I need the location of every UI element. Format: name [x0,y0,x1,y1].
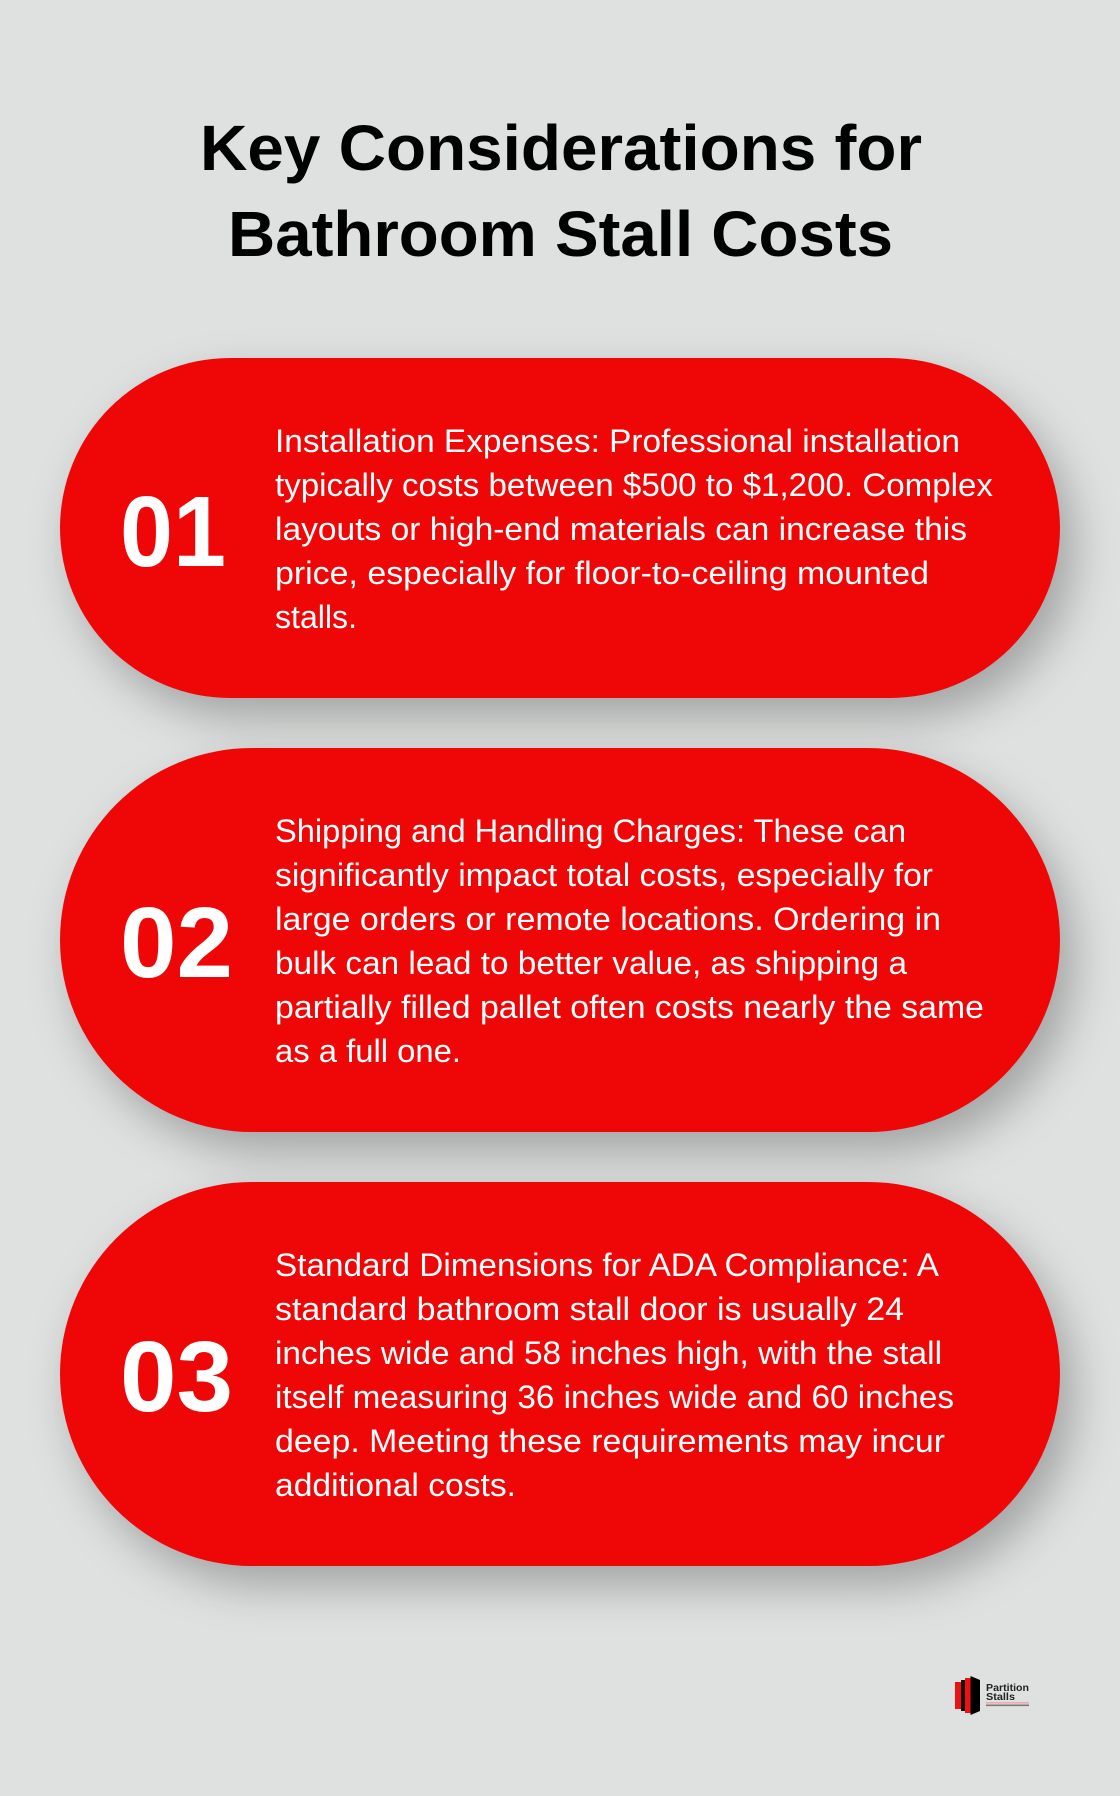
number 03: 03 [120,1321,233,1433]
text block: bulk can lead to better value, as shipping a [275,945,908,981]
text block: partially filled pallet often costs nearly the same [275,989,984,1025]
panel: shipping and handling [60,748,1060,1132]
icon: stall doors [955,1676,980,1715]
text block: Standard Dimensions for ADA Compliance: A [275,1247,939,1283]
text block [275,1247,954,1503]
text block: standard bathroom stall door is usually 24 [275,1291,904,1327]
card background [60,358,1060,698]
text block: additional costs. [275,1467,516,1503]
text block: itself measuring 36 inches wide and 60 inches [275,1379,954,1415]
logo: Partition Stalls [955,1676,1029,1715]
title: Key Considerations for [200,112,922,184]
text block: large orders or remote locations. Ordering in [275,901,941,937]
text block: layouts or high-end materials can increase this [275,511,967,547]
logo wordmark: Partition [986,1682,1029,1694]
number 02: 02 [120,887,233,999]
text block [275,813,984,1069]
text block: deep. Meeting these requirements may incur [275,1423,945,1459]
text block [275,423,993,635]
text block: inches wide and 58 inches high, with the stall [275,1335,942,1371]
panel: installation expenses [60,358,1060,698]
panel: ADA compliance dimensions [60,1182,1060,1566]
card background [60,748,1060,1132]
text block: stalls. [275,599,357,635]
text block: Installation Expenses: Professional installation [275,423,960,459]
text block: significantly impact total costs, especially for [275,857,933,893]
text block: typically costs between $500 to $1,200. Complex [275,467,993,503]
card background [60,1182,1060,1566]
logo wordmark [986,1682,1029,1706]
text block: as a full one. [275,1033,461,1069]
text block: price, especially for floor-to-ceiling mounted [275,555,929,591]
logo wordmark: Stalls [986,1691,1015,1703]
text block: Shipping and Handling Charges: These can [275,813,906,849]
title: Bathroom Stall Costs [228,198,893,270]
title [200,112,922,270]
number 01: 01 [120,476,226,588]
